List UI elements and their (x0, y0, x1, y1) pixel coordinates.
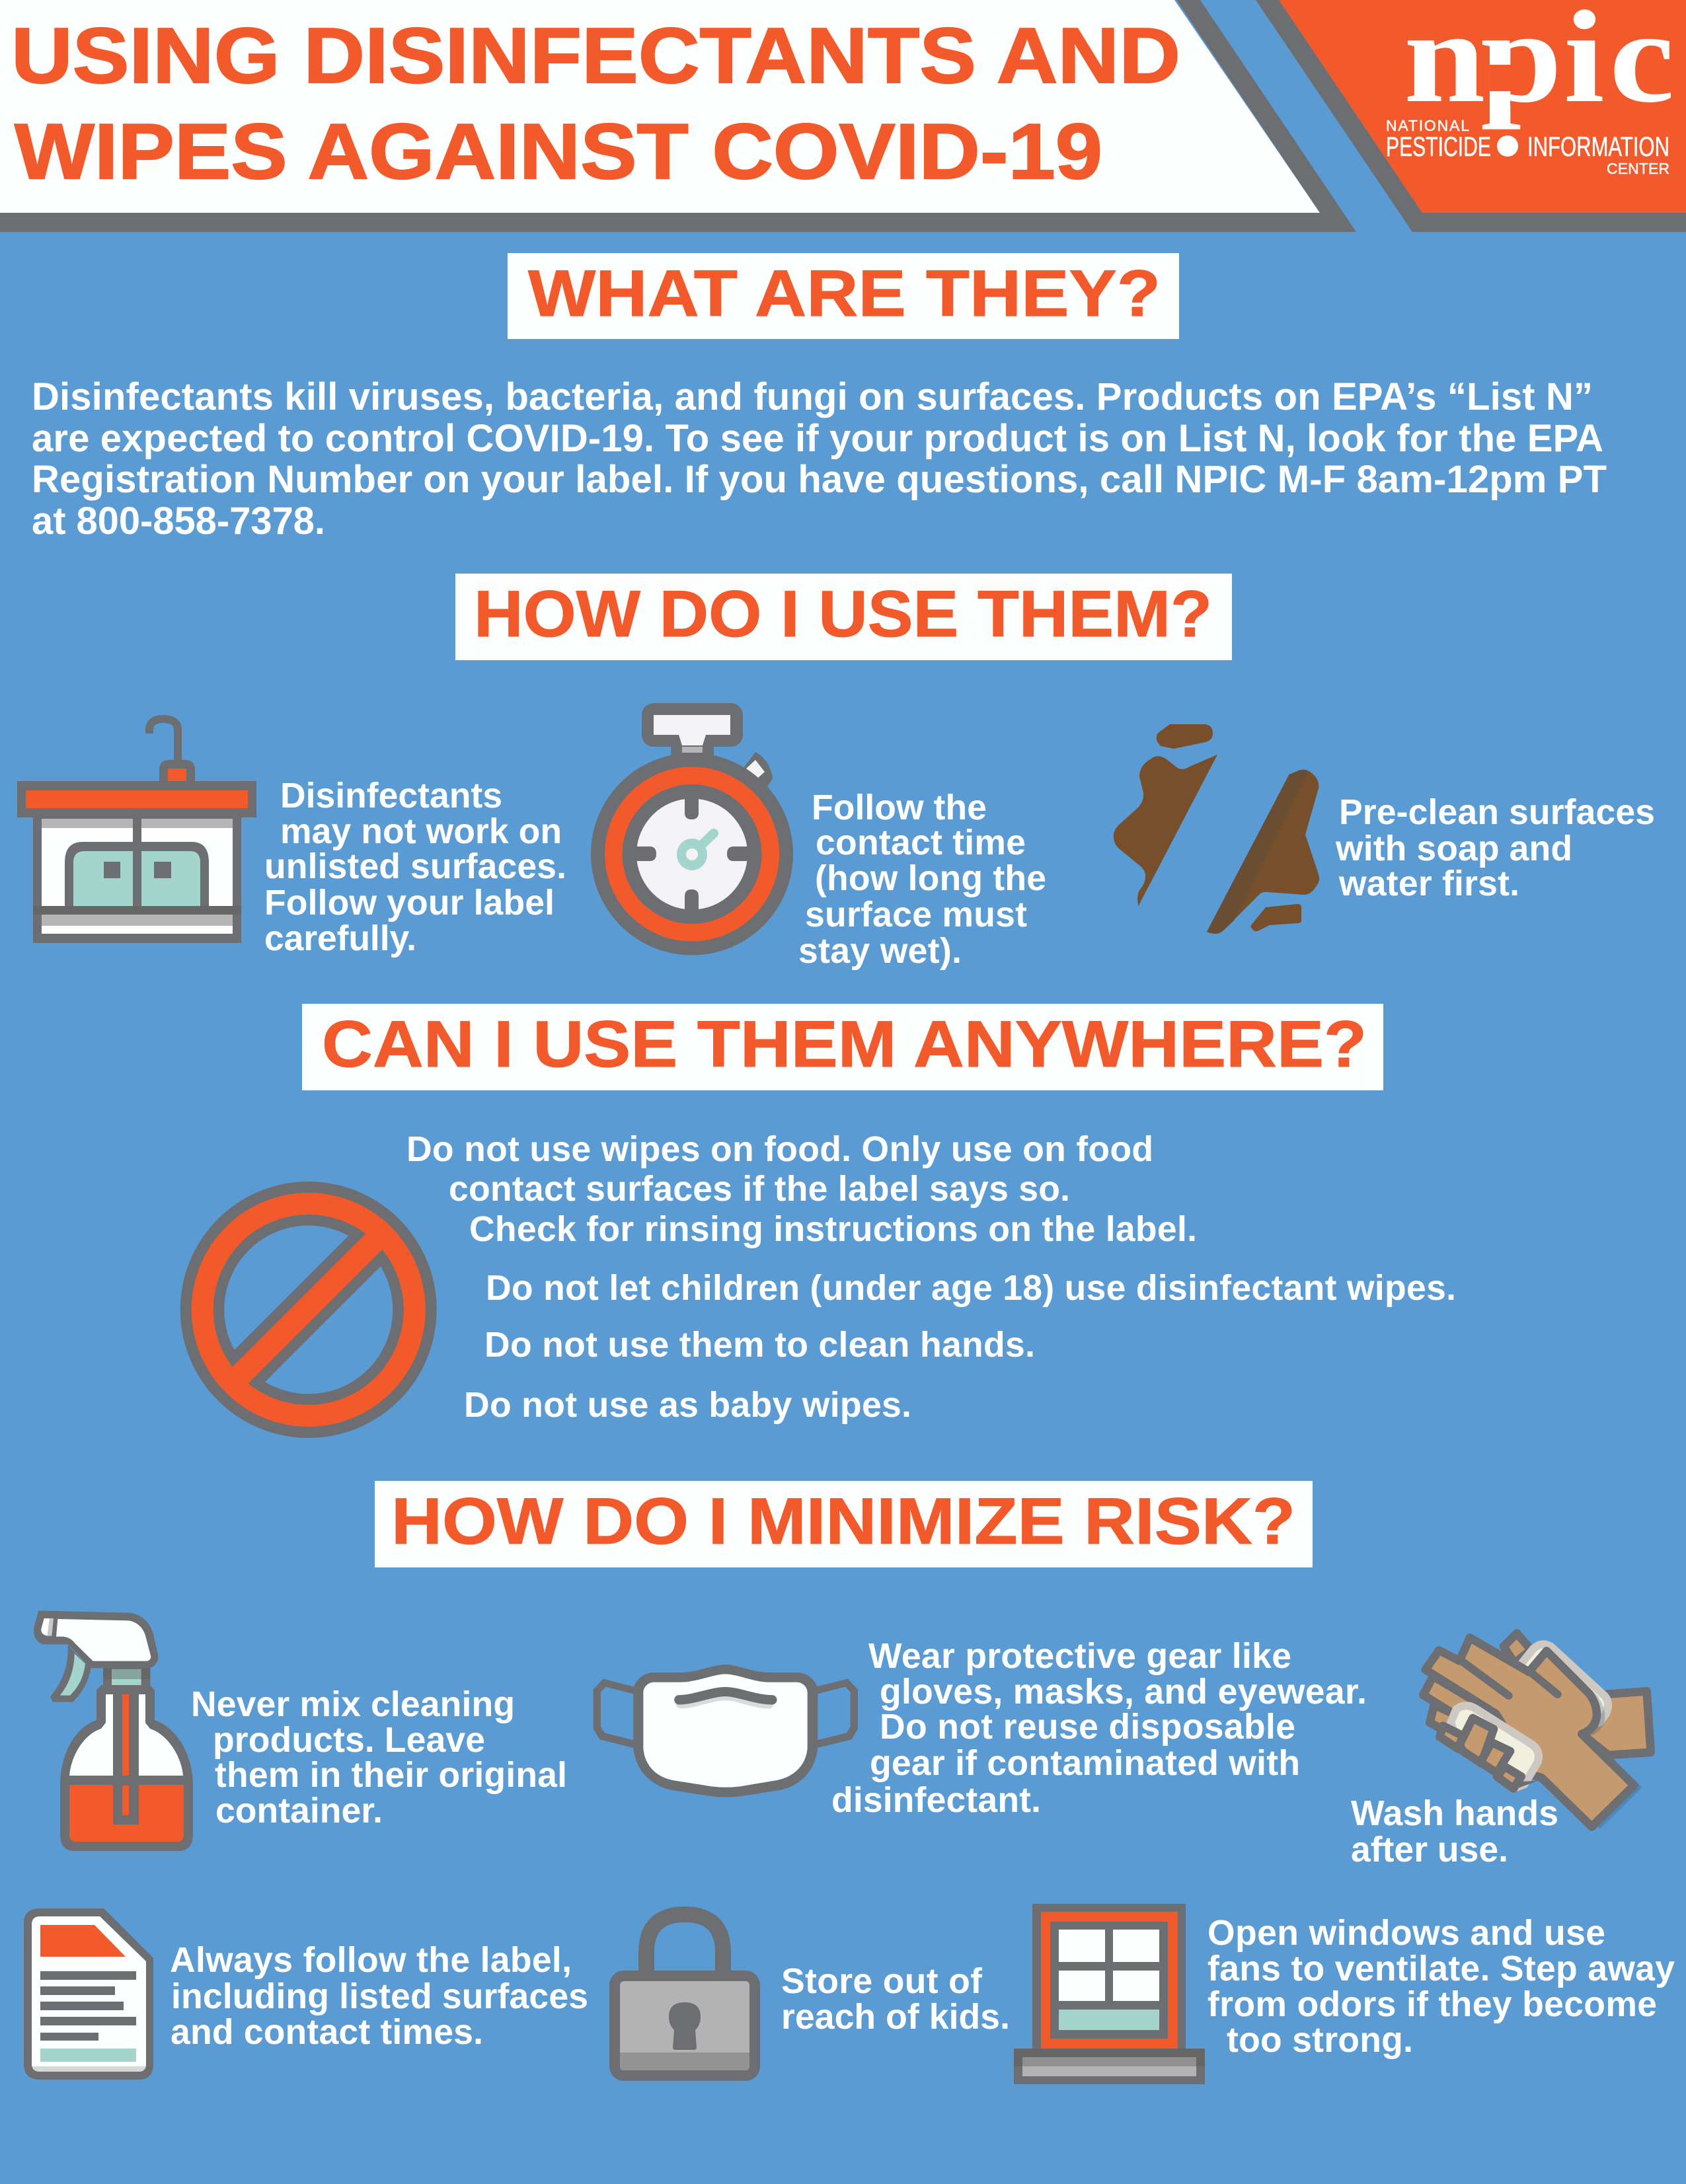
heading: how do i use them: HOW DO I USE THEM? (474, 577, 1212, 650)
text: never mix: container. (215, 1791, 383, 1830)
intro paragraph: Disinfectants kill viruses, bacteria, and fungi on surfaces. Products on EPA’s “List N” (32, 375, 1593, 418)
text: restrictions list: Do not use them to clean hands. (484, 1326, 1035, 1365)
icon: padlock (609, 1914, 760, 2081)
text: ventilate: Open windows and use (1207, 1914, 1605, 1953)
text: wash hands (1351, 1794, 1558, 1869)
icon: spray bottle (34, 1610, 193, 1851)
text: protective gear: Wear protective gear like (868, 1637, 1291, 1676)
text: contact time: contact time (816, 823, 1026, 862)
text: unlisted surfaces: may not work on (280, 812, 562, 851)
intro paragraph: at 800-858-7378. (32, 500, 325, 543)
text: never mix: products. Leave (213, 1721, 485, 1760)
icon: stopwatch (591, 703, 793, 956)
text: store out of reach: reach of kids. (781, 1998, 1010, 2037)
text: follow the label (170, 1941, 588, 2052)
text: never mix (191, 1685, 567, 1830)
text: wash hands: Wash hands (1351, 1794, 1558, 1833)
text: restrictions list: Do not use as baby wipes. (464, 1386, 911, 1425)
title: USING DISINFECTANTS AND (11, 12, 1180, 100)
intro paragraph: Registration Number on your label. If you have questions, call NPIC M-F 8am-12pm PT (32, 458, 1607, 501)
text: restrictions list: Check for rinsing instructions on the label. (469, 1210, 1197, 1249)
text: contact time: stay wet). (798, 932, 962, 971)
icon: sink (17, 719, 256, 943)
text: protective gear: Do not reuse disposable (880, 1708, 1295, 1747)
text: pre-clean: Pre-clean surfaces (1339, 793, 1655, 832)
NPIC logo: PESTICIDE (1386, 131, 1491, 162)
text: pre-clean: water first. (1338, 864, 1519, 903)
text: never mix: them in their original (215, 1756, 567, 1795)
heading: how do i minimize risk: HOW DO I MINIMIZE RISK? (391, 1484, 1295, 1558)
header banner (0, 0, 1686, 232)
text: unlisted surfaces: unlisted surfaces. (264, 847, 566, 886)
text: ventilate (1207, 1914, 1675, 2060)
intro paragraph: are expected to control COVID-19. To see if your product is on List N, look for the EPA (32, 417, 1603, 460)
text: unlisted surfaces (264, 776, 566, 958)
text: protective gear: gear if contaminated with (870, 1744, 1300, 1783)
text: ventilate: fans to ventilate. Step away (1207, 1949, 1675, 1988)
text: restrictions list: Do not use wipes on food. Only use on food (406, 1130, 1153, 1169)
title: WIPES AGAINST COVID-19 (15, 108, 1102, 196)
text: ventilate: from odors if they become (1207, 1985, 1657, 2024)
NPIC logo (1386, 0, 1675, 177)
text: protective gear (831, 1637, 1367, 1820)
text: restrictions list: Do not let children (under age 18) use disinfectant wipes. (486, 1269, 1456, 1308)
text: store out of reach (781, 1962, 1010, 2037)
icon: dirt stains (1114, 724, 1319, 934)
text: contact time: surface must (805, 895, 1027, 934)
text: contact time: (how long the (815, 859, 1046, 898)
text: follow the label: and contact times. (171, 2013, 483, 2052)
text: restrictions list (406, 1130, 1456, 1425)
text: protective gear: gloves, masks, and eyewear. (880, 1673, 1367, 1712)
text: pre-clean: with soap and (1335, 829, 1572, 868)
icon: washing hands (1423, 1634, 1651, 1829)
text: contact time (798, 788, 1046, 971)
icon: face mask (594, 1665, 858, 1797)
icon: window (1014, 1904, 1205, 2084)
text: pre-clean (1335, 793, 1655, 903)
text: follow the label: Always follow the label, (170, 1941, 572, 1980)
icon: label document (24, 1908, 153, 2080)
heading: what are they: WHAT ARE THEY? (528, 256, 1161, 330)
text: never mix: Never mix cleaning (191, 1685, 515, 1724)
text: follow the label: including listed surfaces (171, 1977, 588, 2016)
NPIC logo: CENTER (1607, 160, 1669, 177)
text: protective gear: disinfectant. (831, 1781, 1041, 1820)
text: wash hands: after use. (1351, 1830, 1508, 1869)
text: ventilate: too strong. (1227, 2021, 1413, 2060)
title (11, 12, 1180, 196)
text: unlisted surfaces: Disinfectants (280, 776, 502, 815)
text: unlisted surfaces: carefully. (264, 919, 416, 958)
heading: can i use them anywhere: CAN I USE THEM ANYWHERE? (322, 1007, 1367, 1080)
text: contact time: Follow the (812, 788, 987, 827)
icon: prohibition sign (180, 1182, 437, 1438)
text: restrictions list: contact surfaces if the label says so. (449, 1170, 1070, 1209)
NPIC logo: NATIONAL (1386, 117, 1469, 134)
text: store out of reach: Store out of (781, 1962, 982, 2001)
intro paragraph (32, 375, 1607, 543)
text: unlisted surfaces: Follow your label (264, 884, 555, 923)
